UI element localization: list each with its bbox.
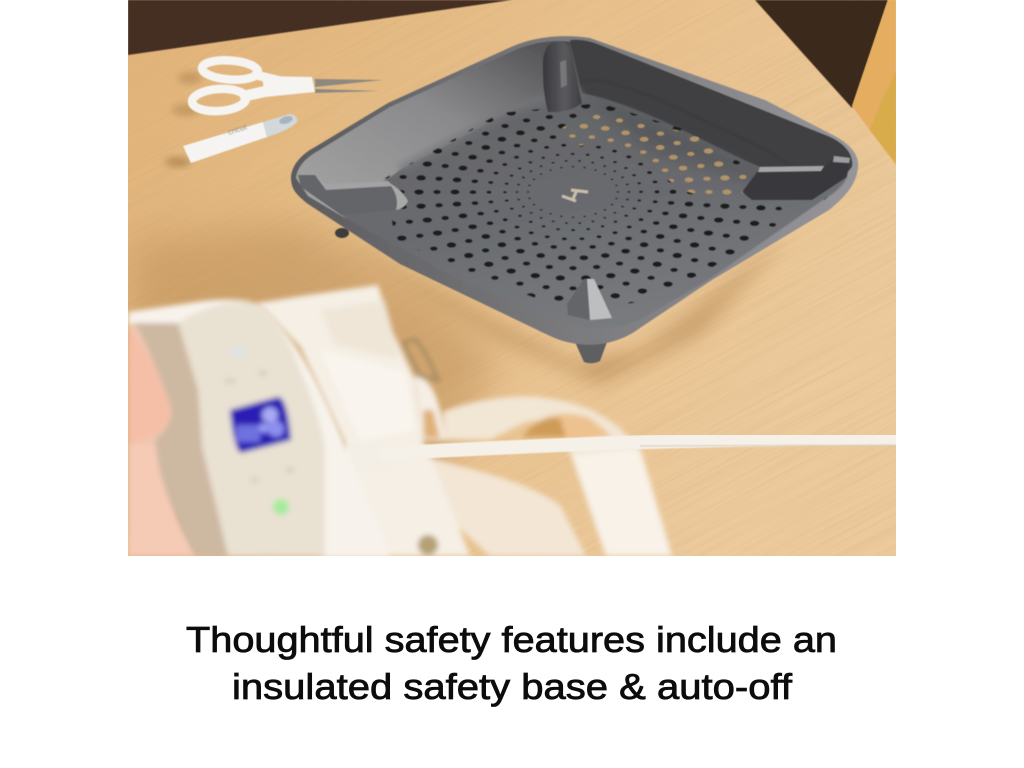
wooden frame at top right	[852, 0, 896, 165]
power cord	[420, 435, 896, 458]
hand	[128, 325, 198, 556]
woven yellow strip	[870, 72, 896, 163]
caption	[186, 619, 837, 707]
icon: scissors	[172, 59, 383, 116]
handheld heat press	[128, 299, 390, 556]
back leg	[335, 228, 349, 238]
canvas tote bag	[258, 285, 672, 556]
right support foot	[742, 156, 850, 200]
metal ring	[403, 339, 438, 380]
dark background behind table, left	[128, 0, 512, 55]
top support foot	[543, 41, 582, 112]
grommet	[418, 535, 438, 555]
icon: weeding tool	[165, 114, 297, 167]
press control face	[178, 302, 325, 556]
control buttons	[224, 370, 295, 483]
dark background behind table, right	[755, 0, 888, 108]
icon: weeding tool: cricut	[227, 122, 249, 137]
front leg	[575, 342, 607, 363]
table top	[128, 0, 896, 556]
centre logo	[562, 190, 588, 201]
tote body	[258, 285, 470, 556]
perforated floor	[320, 93, 847, 329]
caption line 2: insulated safety base & auto-off	[232, 666, 793, 707]
left wall, lighter side	[296, 41, 585, 218]
outer rim	[291, 36, 858, 345]
tote folds	[328, 356, 410, 436]
display screen	[230, 397, 291, 453]
green status light	[273, 499, 289, 515]
right wall, darker side	[570, 40, 852, 200]
left support foot	[298, 175, 408, 215]
soft wall-to-floor shading	[400, 93, 582, 170]
panel: product photo	[128, 0, 896, 556]
holes showing wood through	[562, 114, 748, 196]
safety base tray	[291, 36, 858, 363]
bottom support foot	[567, 279, 612, 320]
caption line 1: Thoughtful safety features include an	[186, 619, 837, 660]
darker far floor	[605, 102, 759, 181]
tote straps	[415, 376, 672, 556]
power light	[229, 347, 247, 357]
press white rim	[128, 299, 390, 556]
press shaded handle	[135, 323, 228, 556]
perforation holes	[384, 104, 782, 304]
